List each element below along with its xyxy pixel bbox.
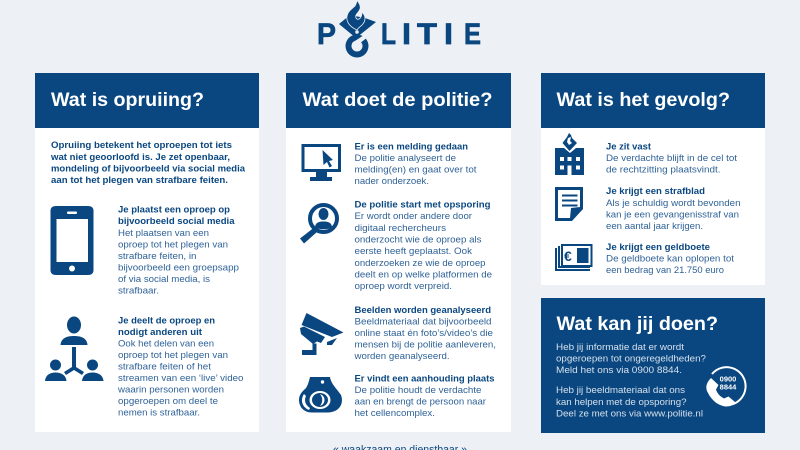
text: melding: De politie analyseert de — [354, 152, 456, 163]
text: strafblad — [606, 185, 740, 231]
text: oproep plaatsen: strafbare feiten, in — [118, 250, 196, 261]
text: oproep delen: oproep tot het plegen van — [118, 349, 228, 360]
logo: Politie: I — [444, 18, 453, 51]
text: vast — [606, 140, 737, 174]
text: melding: nader onderzoek. — [354, 175, 429, 186]
icon: people network — [45, 316, 104, 381]
text: oproep plaatsen: oproep tot het plegen van — [118, 238, 228, 250]
text: intro — [50, 139, 246, 185]
icon: police station — [555, 133, 584, 175]
text: geldboete: De geldboete kan oplopen tot — [606, 252, 734, 264]
text: deel: kan helpen met de opsporing? — [556, 396, 686, 407]
text: oproep plaatsen: strafbaar. — [118, 284, 159, 296]
text: oproep delen: streamen van een ‘live’ video — [118, 372, 244, 383]
text: oproep plaatsen — [118, 204, 239, 296]
header: Wat doet de politie — [286, 73, 511, 128]
text: oproep delen: Ook het delen van een — [118, 338, 214, 348]
text: intro: aan tot het plegen van strafbare feiten. — [51, 174, 228, 185]
text: aanhouding: De politie houdt de verdachte — [354, 384, 482, 395]
text: opsporing: onderzocht wie de oproep als — [354, 234, 482, 244]
logo: Politie: P — [317, 18, 336, 51]
text: oproep plaatsen: Je plaatst een oproep op — [118, 204, 230, 214]
text: strafblad: een aantal jaar krijgen. — [606, 220, 703, 231]
text: melding: Er is een melding gedaan — [354, 140, 468, 152]
text: oproep delen — [117, 314, 244, 418]
icon: police badge — [339, 0, 377, 58]
text: opsporing: digitaal rechercheurs — [354, 222, 446, 233]
text: melding — [354, 140, 477, 186]
text: geldboete: Je krijgt een geldboete — [606, 241, 710, 252]
text: aanhouding: aan en brengt de persoon naar — [354, 396, 486, 406]
text: oproep delen: opgeroepen om deel te — [118, 395, 218, 406]
text: meld — [556, 341, 706, 375]
text: geldboete: een bedrag van 21.750 euro — [606, 264, 724, 275]
panel: Wat kan jij doen — [541, 298, 765, 433]
text: meld: opgeroepen tot ongeregeldheden? — [556, 352, 706, 364]
header: Wat is het gevolg — [541, 73, 765, 128]
text: vast: De verdachte blijft in de cel tot — [606, 152, 737, 163]
text: beelden: online staat én foto’s/video’s die — [354, 327, 493, 338]
logo: Politie — [317, 0, 481, 58]
text: meld: Heb jij informatie dat er wordt — [556, 341, 684, 352]
text: strafblad: Als je schuldig wordt bevonden — [606, 197, 740, 208]
icon: banknotes — [555, 244, 592, 271]
text: aanhouding — [354, 372, 494, 418]
text: intro: Opruiing betekent het oproepen tot iets — [51, 139, 232, 150]
text: oproep delen: nemen is strafbaar. — [118, 406, 200, 418]
panel: Wat is het gevolg — [541, 73, 765, 285]
panel: Wat is opruiing — [35, 73, 259, 432]
icon: magnifier with person — [300, 205, 337, 244]
text: deel: Heb jij beeldmateriaal dat ons — [556, 384, 685, 395]
text: oproep delen: strafbare feiten of het — [118, 360, 211, 372]
logo: Politie: I — [402, 18, 411, 51]
header: Wat is opruiing — [35, 73, 259, 128]
text: opsporing: onderzoeken ze wie de oproep — [354, 257, 486, 268]
text: opsporing: eerste heeft geplaatst. Ook — [354, 245, 472, 256]
header: Wat is het gevolg: Wat is het gevolg? — [556, 89, 730, 111]
icon: banknotes: € — [564, 248, 572, 264]
icon: phone 0900 8844: 8844 — [720, 382, 737, 392]
text: opsporing: oproep wordt verpreid. — [354, 280, 452, 291]
text: beelden: mensen bij de politie aanleveren, — [354, 338, 496, 350]
panel: Wat doet de politie — [286, 73, 511, 432]
panel: Wat kan jij doen: Wat kan jij doen? — [556, 313, 718, 335]
text: strafblad: kan je een gevangenisstraf van — [606, 208, 739, 220]
text: beelden: worden geanalyseerd. — [353, 350, 450, 361]
icon: phone 0900 8844 — [706, 367, 746, 406]
text: geldboete — [606, 241, 734, 275]
text: intro: wat niet geoorloofd is. Je zet openbaar, — [50, 151, 230, 162]
text: oproep plaatsen: bijvoorbeeld een groepsapp — [118, 262, 239, 272]
text: beelden: Beeldmateriaal dat bijvoorbeeld — [354, 316, 492, 326]
text: oproep delen: Je deelt de oproep en — [118, 314, 215, 326]
text: opsporing — [354, 198, 492, 291]
text: intro: mondeling of bijvoorbeeld via social media — [51, 162, 246, 174]
logo: Politie: L — [381, 18, 396, 51]
text: deel — [556, 384, 703, 418]
icon: security camera — [300, 313, 344, 355]
text: oproep delen: waarin personen worden — [117, 384, 224, 394]
text: meld: Meld het ons via 0900 8844. — [556, 364, 682, 375]
text: vast: de rechtzitting plaatsvindt. — [606, 164, 720, 174]
text: opsporing: De politie start met opsporing — [354, 198, 491, 210]
text: aanhouding: Er vindt een aanhouding plaats — [354, 372, 494, 384]
icon: document — [555, 187, 583, 221]
text: oproep delen: nodigt anderen uit — [118, 326, 202, 337]
text: melding: melding(en) en gaat over tot — [354, 164, 477, 174]
header: Wat is opruiing: Wat is opruiing? — [51, 89, 204, 111]
icon: handcuffs — [299, 377, 342, 412]
text: opsporing: Er wordt onder andere door — [354, 210, 472, 221]
header: Wat doet de politie: Wat doet de politie? — [302, 89, 492, 111]
icon: phone 0900 8844: 0900 — [720, 374, 736, 384]
text: opsporing: deelt en op welke platformen de — [354, 268, 492, 280]
text: deel: Deel ze met ons via www.politie.nl — [556, 408, 703, 418]
text: strafblad: Je krijgt een strafblad — [606, 185, 705, 196]
text: oproep plaatsen: Het plaatsen van een — [118, 227, 209, 238]
icon: smartphone — [50, 206, 94, 275]
text: vast: Je zit vast — [606, 140, 651, 152]
text: oproep plaatsen: of via social media, is — [118, 273, 210, 284]
icon: monitor with cursor — [302, 144, 341, 181]
logo: Politie: E — [464, 18, 481, 51]
text: aanhouding: het cellencomplex. — [354, 407, 435, 418]
text: oproep plaatsen: bijvoorbeeld social media — [118, 215, 235, 226]
logo: Politie: T — [417, 18, 437, 51]
text: beelden — [353, 304, 496, 361]
text: beelden: Beelden worden geanalyseerd — [354, 304, 491, 315]
